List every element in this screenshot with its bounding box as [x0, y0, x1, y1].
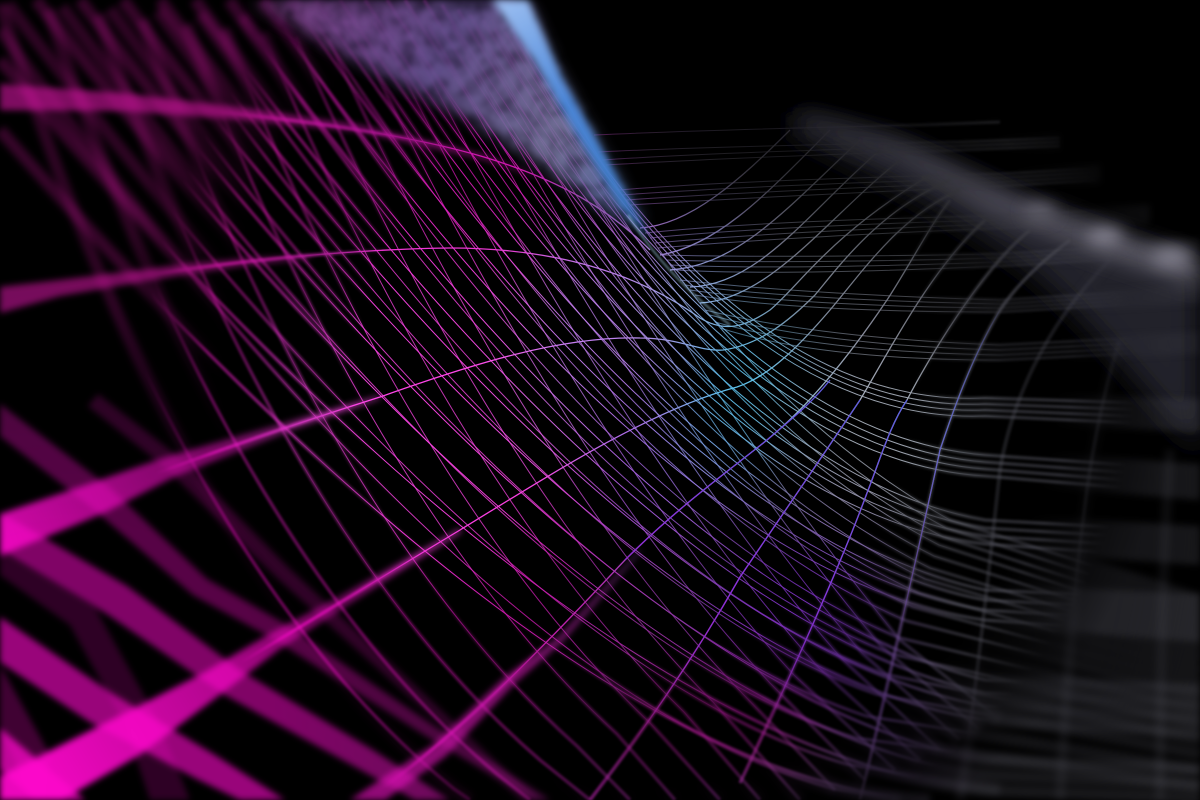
blurred upper wing: blue edge: [492, 0, 650, 240]
blurred upper wing: mottled purple haze: [252, 0, 645, 228]
blurred grey ridge, upper right: [790, 112, 1200, 450]
bright ridge highlight at the pinch: [628, 215, 730, 325]
violet cross arcs, lower right: [624, 311, 999, 730]
